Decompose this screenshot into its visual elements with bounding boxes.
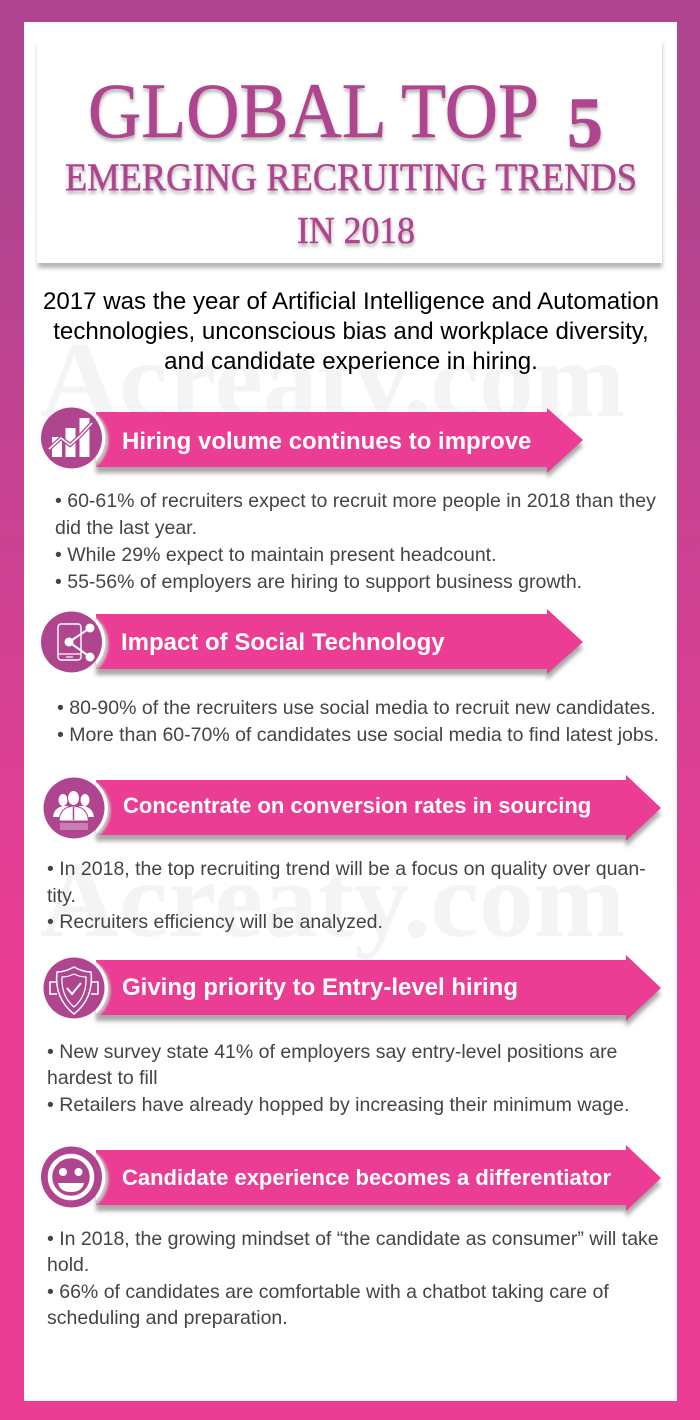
text block: candidate experience: • In 2018, the growing mindset of “the candidate as consumer” will take xyxy=(47,1228,659,1250)
arrow 2: Impact of Social Technology xyxy=(121,629,445,656)
text block: conversion rates: • Recruiters efficiency will be analyzed. xyxy=(47,911,383,933)
text block: conversion rates: • In 2018, the top recruiting trend will be a focus on quality over quan- xyxy=(47,858,646,880)
text block: candidate experience: • 66% of candidates are comfortable with a chatbot taking care of xyxy=(47,1281,609,1303)
title card xyxy=(37,40,662,268)
text block: hiring volume: • While 29% expect to maintain present headcount. xyxy=(55,544,497,566)
text block: social technology xyxy=(57,697,659,746)
text block: conversion rates: tity. xyxy=(47,885,76,907)
icon: team xyxy=(44,778,112,838)
arrow 3 xyxy=(96,775,661,847)
arrow 5 xyxy=(96,1145,661,1217)
title: global top 5: 5 xyxy=(567,83,603,163)
text block: candidate experience xyxy=(47,1228,659,1329)
text block: entry-level hiring: • New survey state 41% of employers say entry-level positions are xyxy=(47,1041,617,1063)
title: in 2018: IN 2018 xyxy=(297,210,415,252)
intro text: technologies, unconscious bias and workplace diversity, xyxy=(53,318,649,345)
text block: hiring volume: did the last year. xyxy=(55,517,197,539)
text block: candidate experience: scheduling and preparation. xyxy=(47,1307,288,1329)
text block: hiring volume: • 55-56% of employers are hiring to support business growth. xyxy=(55,571,582,593)
arrow 2 xyxy=(96,609,583,680)
icon: smiley xyxy=(41,1146,110,1208)
icon: growth chart xyxy=(41,408,110,468)
intro text: 2017 was the year of Artificial Intelligence and Automation xyxy=(43,288,659,315)
text block: social technology: • More than 60-70% of candidates use social media to find latest jobs. xyxy=(57,724,659,746)
arrow 5: Candidate experience becomes a differentiator xyxy=(122,1165,611,1190)
text block: entry-level hiring: • Retailers have already hopped by increasing their minimum wage. xyxy=(47,1094,629,1116)
watermark top: Acreaty.com xyxy=(40,321,625,440)
arrow 4 xyxy=(96,955,661,1027)
intro text xyxy=(43,288,659,375)
watermark bottom: Acreaty.com xyxy=(40,841,625,960)
infographic graphics layer xyxy=(36,42,664,1218)
text block: conversion rates xyxy=(47,858,646,933)
icon: mobile share xyxy=(41,612,110,672)
title: emerging recruiting trends: EMERGING RECRUITING TRENDS xyxy=(65,156,637,199)
intro text: and candidate experience in hiring. xyxy=(164,348,538,375)
text block: entry-level hiring: hardest to fill xyxy=(47,1067,158,1089)
icon: shield xyxy=(44,958,112,1018)
text block: hiring volume: • 60-61% of recruiters expect to recruit more people in 2018 than they xyxy=(55,490,656,512)
arrow 1 xyxy=(96,408,583,478)
arrow 1: Hiring volume continues to improve xyxy=(122,428,531,455)
arrow 3: Concentrate on conversion rates in sourcing xyxy=(123,793,591,818)
text block: entry-level hiring xyxy=(47,1041,629,1116)
text block: candidate experience: hold. xyxy=(47,1254,89,1276)
text block: social technology: • 80-90% of the recruiters use social media to recruit new candidates. xyxy=(57,697,656,719)
arrow 4: Giving priority to Entry-level hiring xyxy=(122,974,518,1001)
title: global top 5: GLOBAL TOP xyxy=(88,67,539,154)
text block: hiring volume xyxy=(55,490,656,593)
